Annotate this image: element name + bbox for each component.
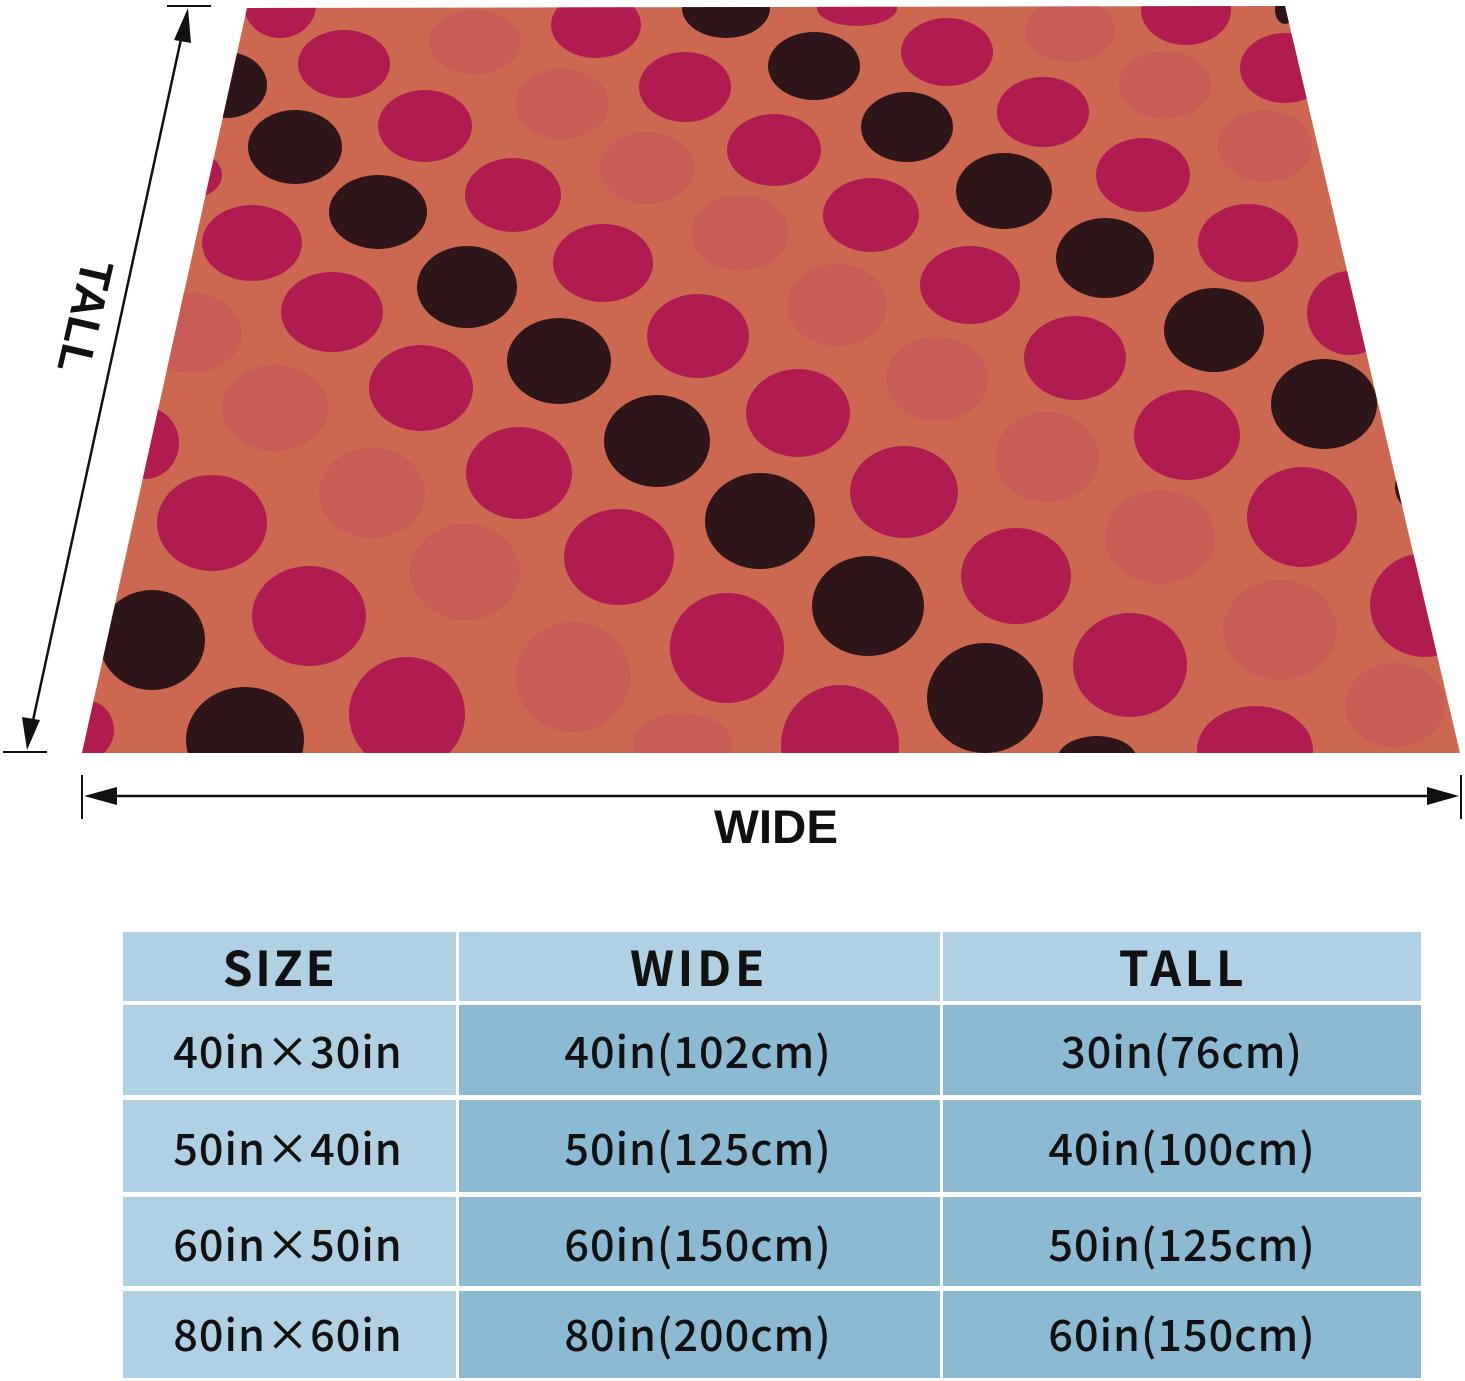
row 40in x 30in xyxy=(123,1005,1421,1095)
row 80in x 60in xyxy=(123,1291,1421,1378)
row 60in x 50in xyxy=(123,1197,1421,1286)
table header row: TALL xyxy=(1119,930,1247,1000)
row 60in x 50in: 60in×50in xyxy=(173,1212,403,1274)
row 40in x 30in: 40in×30in xyxy=(173,1019,403,1081)
row 60in x 50in: 60in(150cm) xyxy=(564,1212,832,1274)
row 50in x 40in: 50in(125cm) xyxy=(564,1116,832,1178)
crimson dots xyxy=(82,6,1438,753)
wide dimension arrow xyxy=(82,775,1461,819)
row 50in x 40in xyxy=(123,1100,1421,1192)
table header row xyxy=(123,930,1421,1001)
table header row: SIZE xyxy=(223,930,337,1000)
row 50in x 40in: 40in(100cm) xyxy=(1048,1116,1316,1178)
row 40in x 30in: 40in(102cm) xyxy=(564,1019,832,1081)
pale pink dots xyxy=(138,0,1445,777)
wide label: WIDE xyxy=(714,801,838,854)
blanket with polka dot pattern xyxy=(82,6,1460,753)
row 80in x 60in: 60in(150cm) xyxy=(1048,1302,1316,1364)
row 40in x 30in: 30in(76cm) xyxy=(1061,1019,1303,1081)
tall dimension arrow xyxy=(3,6,211,752)
tall label: TALL xyxy=(47,255,124,378)
row 80in x 60in: 80in×60in xyxy=(173,1302,403,1364)
size table xyxy=(123,930,1421,1378)
table header row: WIDE xyxy=(630,930,768,1000)
row 50in x 40in: 50in×40in xyxy=(173,1116,403,1178)
row 80in x 60in: 80in(200cm) xyxy=(564,1302,832,1364)
row 60in x 50in: 50in(125cm) xyxy=(1048,1212,1316,1274)
dark brown dots xyxy=(99,0,1455,793)
